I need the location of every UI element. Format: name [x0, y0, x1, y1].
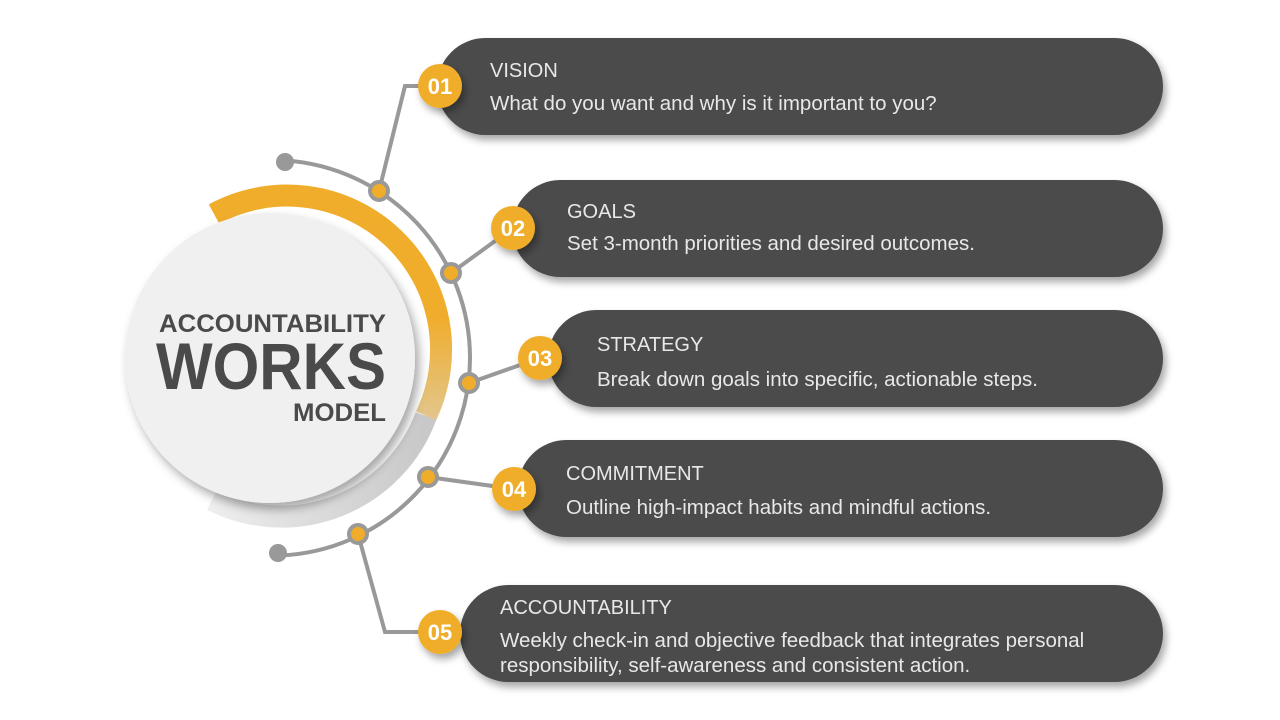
center circle with title: WORKS — [156, 329, 386, 403]
badge numbers: 03 — [528, 346, 552, 371]
center circle with title: MODEL — [293, 399, 386, 427]
badge numbers: 05 — [428, 620, 452, 645]
center circle with title: ACCOUNTABILITY — [159, 310, 386, 338]
pill: 04 commitment — [518, 440, 1163, 537]
orange progress ring — [214, 196, 441, 416]
badge numbers: 01 — [428, 74, 452, 99]
pill: 04 commitment: Outline high-impact habits and mindful actions. — [566, 496, 991, 519]
pill: 02 goals — [512, 180, 1163, 277]
badge numbers: 02 — [501, 216, 525, 241]
pill: 04 commitment: COMMITMENT — [566, 463, 704, 485]
pill: 05 accountability — [460, 585, 1163, 682]
center circle with title — [125, 213, 415, 503]
pill: 01 vision: VISION — [490, 60, 558, 82]
pill: 01 vision: What do you want and why is it important to you? — [490, 92, 937, 115]
arc node dots — [349, 182, 478, 543]
pill: 02 goals: GOALS — [567, 201, 636, 223]
pill: 05 accountability: responsibility, self-awareness and consistent action. — [500, 654, 970, 677]
pill: 03 strategy — [548, 310, 1163, 407]
arc end dots — [269, 153, 294, 562]
badge numbers — [428, 74, 552, 645]
pill: 03 strategy: STRATEGY — [597, 334, 703, 356]
grey timeline arc with connectors — [280, 86, 540, 632]
pill: 05 accountability: ACCOUNTABILITY — [500, 597, 672, 619]
pill: 02 goals: Set 3-month priorities and desired outcomes. — [567, 232, 975, 255]
grey lower ring — [212, 416, 426, 517]
badge numbers: 04 — [502, 477, 527, 502]
pill: 03 strategy: Break down goals into specific, actionable steps. — [597, 368, 1038, 391]
pill: 05 accountability: Weekly check-in and objective feedback that integrates personal — [500, 629, 1084, 652]
number badges — [418, 64, 562, 654]
pill: 01 vision — [437, 38, 1163, 135]
